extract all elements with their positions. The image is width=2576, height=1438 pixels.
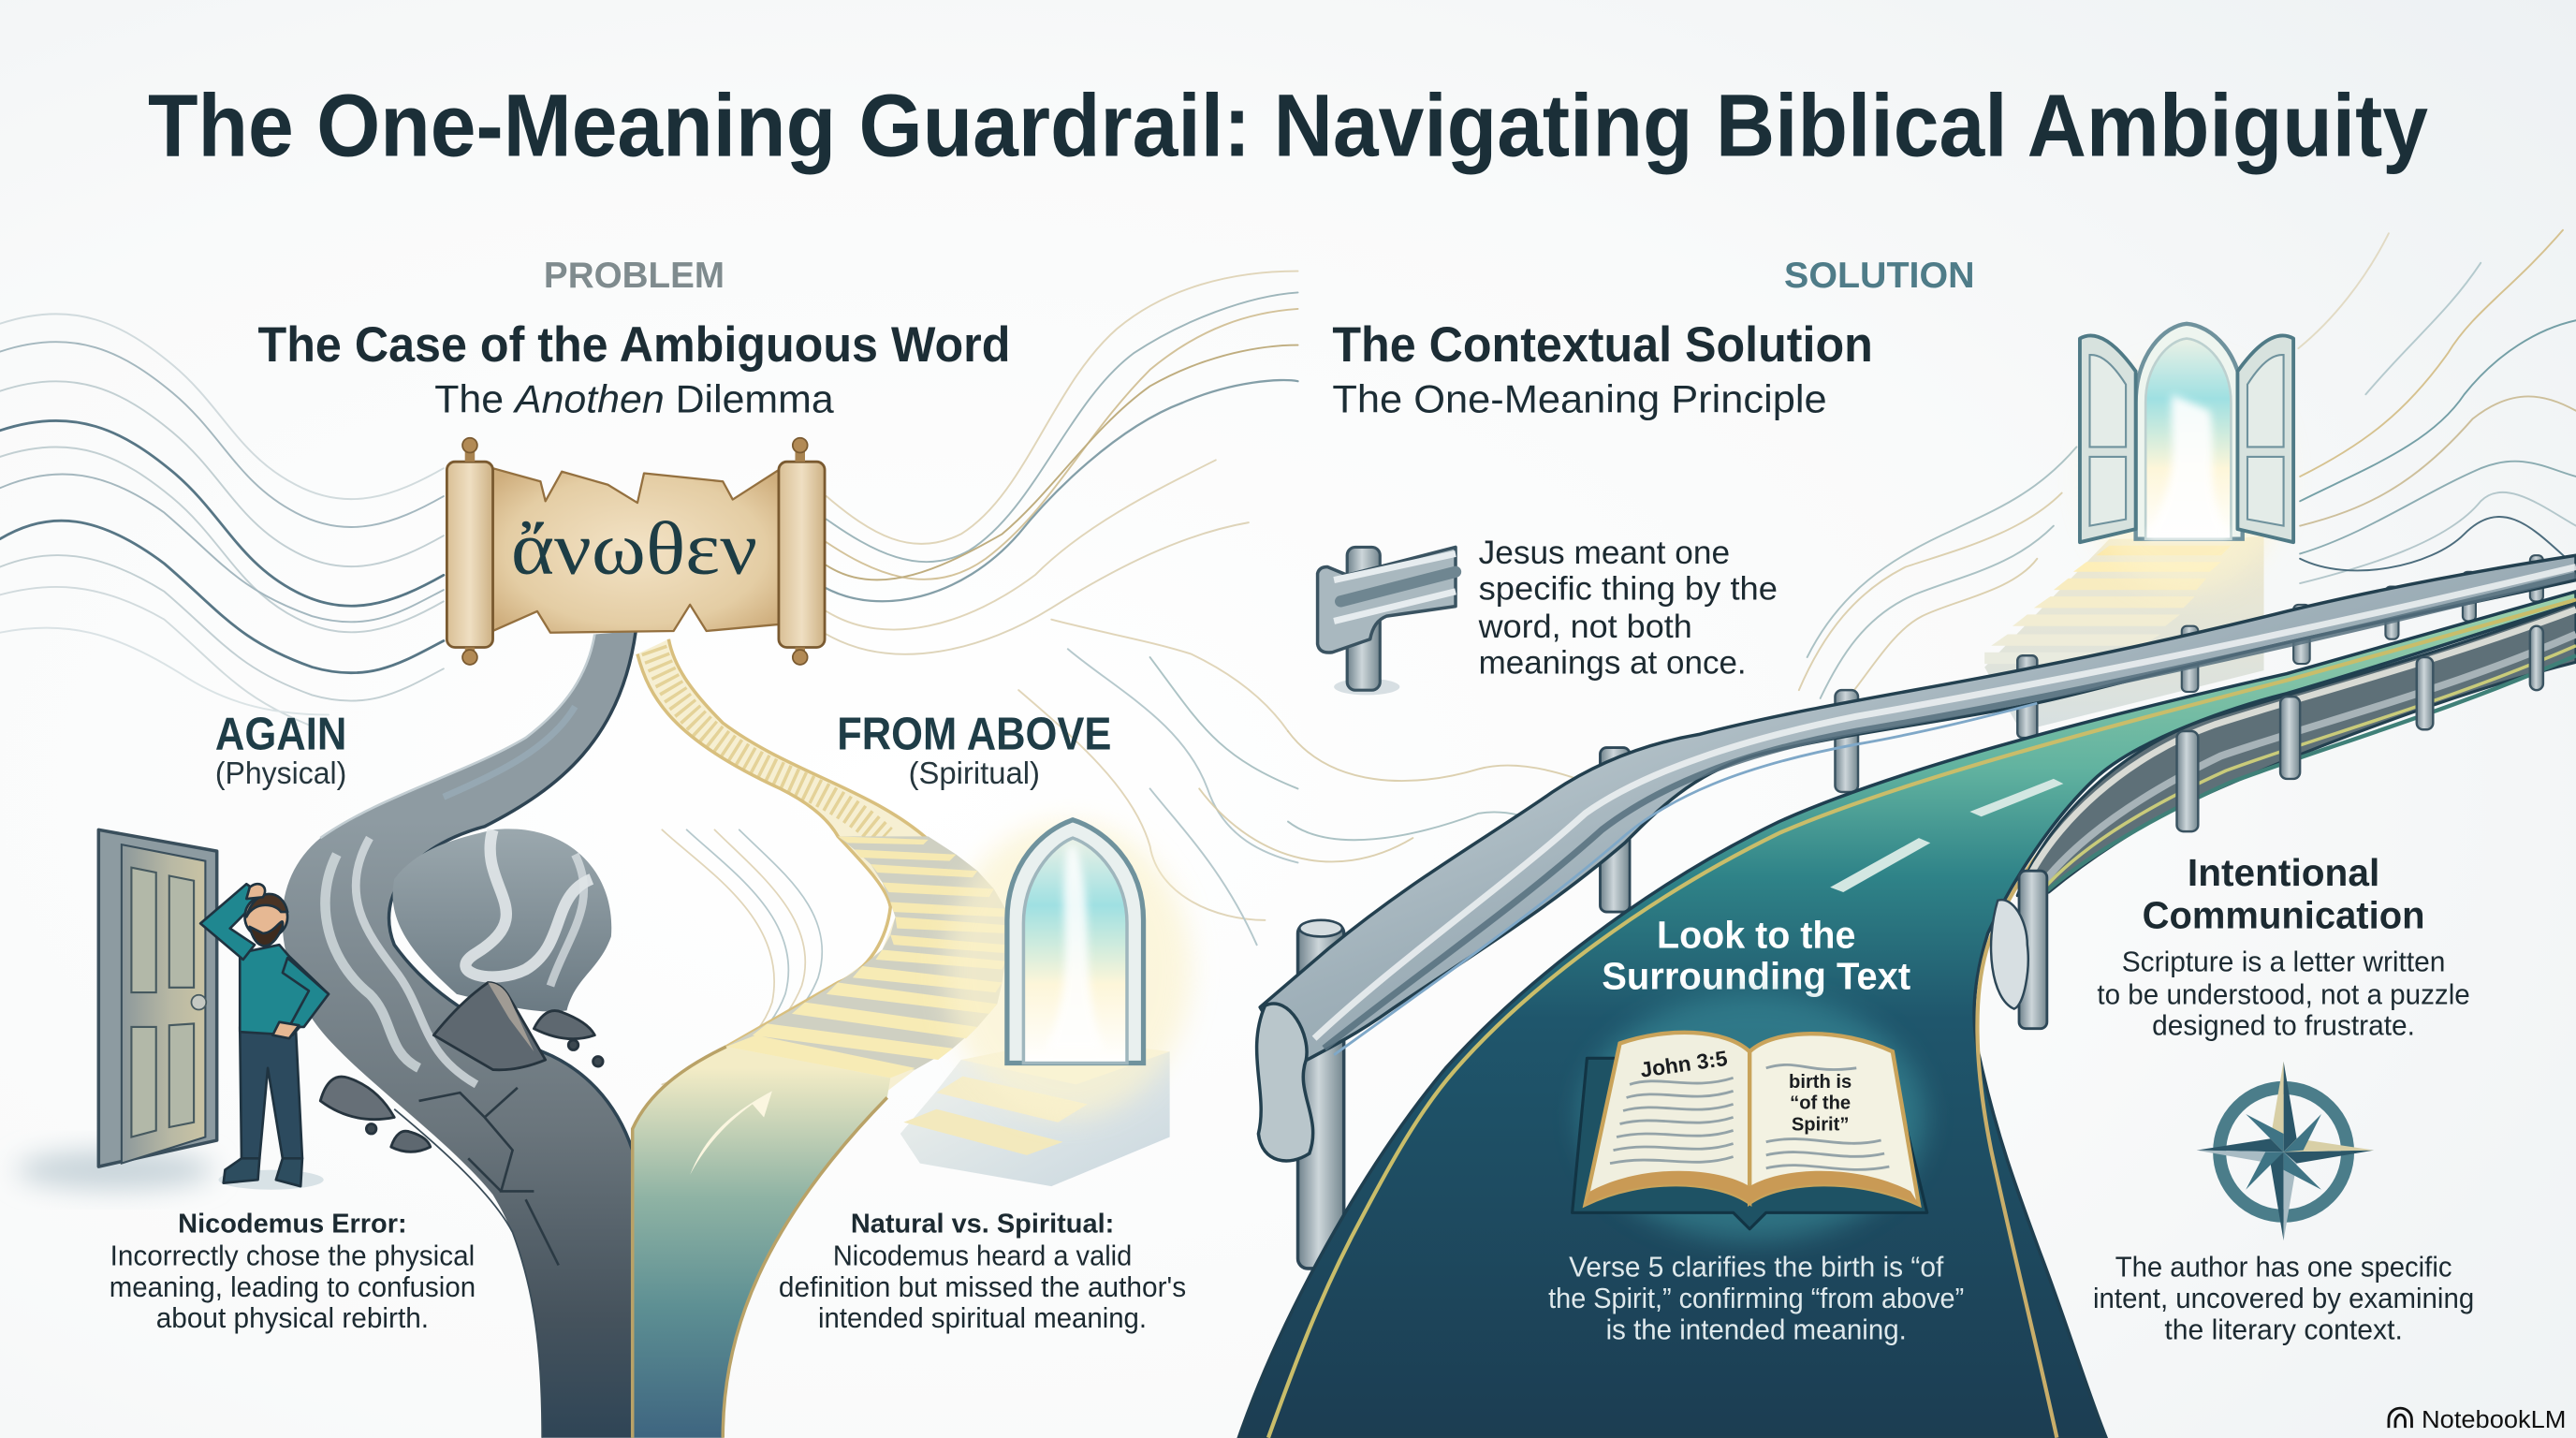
text: verse 5 clarifies xyxy=(1548,1253,1964,1345)
text: verse 5 clarifies: is the intended meaning. xyxy=(1606,1314,1907,1345)
section label: solution: SOLUTION xyxy=(1784,256,1975,296)
guardrail: left xyxy=(1257,555,2576,1161)
text: jesus meant one thing xyxy=(1478,535,1778,682)
text: scripture is a letter xyxy=(2097,946,2470,1042)
book text: birth is of the Spirit: birth is xyxy=(1789,1072,1852,1093)
text: nicodemus error: Nicodemus Error: xyxy=(178,1209,407,1239)
text: nicodemus error: Incorrectly chose the physical xyxy=(110,1240,475,1271)
subheading: one-meaning principle: The One-Meaning Principle xyxy=(1332,377,1827,421)
text: nicodemus error: meaning, leading to confusion xyxy=(110,1272,476,1303)
figure: confused man xyxy=(200,884,329,1190)
heading: the case of the ambiguous word: The Case of the Ambiguous Word xyxy=(258,317,1010,373)
heading: look to the surrounding text: Surrounding Text xyxy=(1602,955,1910,998)
text: natural vs spiritual: Natural vs. Spiritual: xyxy=(851,1209,1114,1239)
text: scripture is a letter: designed to frustrate. xyxy=(2152,1011,2415,1042)
book text: John 3:5: John 3:5 xyxy=(1639,1046,1729,1082)
panel: solution xyxy=(1238,256,2576,1438)
heading: the contextual solution: The Contextual Solution xyxy=(1332,317,1873,373)
text: verse 5 clarifies: Verse 5 clarifies the birth is “of xyxy=(1569,1253,1944,1284)
highway xyxy=(1238,592,2576,1438)
text: jesus meant one thing: specific thing by the xyxy=(1479,571,1778,608)
physical path: grey road xyxy=(283,631,636,1438)
scroll with greek word xyxy=(446,438,825,665)
icon: open book John 3:5 xyxy=(1573,994,1927,1240)
icon: compass xyxy=(2197,1062,2374,1240)
text: scripture is a letter: Scripture is a letter written xyxy=(2122,946,2445,977)
text: nicodemus error: about physical rebirth. xyxy=(156,1303,429,1334)
text: scripture is a letter: to be understood, not a puzzle xyxy=(2097,979,2470,1010)
heading: intentional communication: Intentional xyxy=(2188,851,2379,894)
heading: intentional communication xyxy=(2143,851,2425,937)
book text: birth is of the Spirit: “of the xyxy=(1790,1093,1851,1114)
label: again physical: (Physical) xyxy=(215,756,346,791)
text: the author has one intent: intent, uncovered by examining xyxy=(2093,1284,2474,1314)
panel: problem xyxy=(17,256,1191,1438)
text: verse 5 clarifies: the Spirit,” confirming “from above” xyxy=(1548,1284,1964,1314)
label: again physical xyxy=(215,709,346,791)
stairs to open door xyxy=(1984,536,2264,731)
text: natural vs spiritual: Nicodemus heard a valid xyxy=(833,1240,1132,1271)
label: from above spiritual xyxy=(837,709,1111,791)
label: from above spiritual: (Spiritual) xyxy=(909,756,1040,791)
text: natural vs spiritual: intended spiritual meaning. xyxy=(818,1303,1147,1334)
rocks xyxy=(320,983,603,1152)
portal: glowing arch xyxy=(944,820,1191,1117)
heading: intentional communication: Communication xyxy=(2143,894,2425,937)
text: natural vs spiritual xyxy=(779,1209,1186,1334)
text: the author has one intent: The author has one specific xyxy=(2115,1253,2452,1284)
label: from above spiritual: FROM ABOVE xyxy=(837,709,1111,759)
text: the author has one intent: the literary context. xyxy=(2164,1314,2403,1345)
grey smoke swirl xyxy=(393,829,611,1012)
greek word anothen: ἄνωθεν xyxy=(511,507,757,591)
spiritual path: golden staircase xyxy=(633,639,1005,1438)
heading: look to the surrounding text xyxy=(1602,914,1910,998)
subheading: anothen dilemma: The Anothen Dilemma xyxy=(434,377,834,421)
text: jesus meant one thing: word, not both xyxy=(1478,609,1692,645)
guardrail: right xyxy=(1991,603,2576,1029)
text: the author has one intent xyxy=(2093,1253,2474,1345)
guardrail posts behind road xyxy=(1298,555,2543,1269)
text: jesus meant one thing: Jesus meant one xyxy=(1479,535,1730,571)
stairs: platform xyxy=(900,1038,1170,1186)
logo: NotebookLM: NotebookLM xyxy=(2422,1405,2566,1433)
text: natural vs spiritual: definition but missed the author's xyxy=(779,1272,1186,1303)
icon: guardrail xyxy=(1318,547,1456,695)
book text: birth is of the Spirit xyxy=(1789,1072,1852,1136)
decorative flowing lines xyxy=(0,230,2576,1084)
text: nicodemus error xyxy=(110,1209,476,1334)
title: The One-Meaning Guardrail: Navigating Biblical Ambiguity xyxy=(148,77,2428,176)
book text: birth is of the Spirit: Spirit” xyxy=(1792,1115,1849,1136)
heading: look to the surrounding text: Look to the xyxy=(1657,914,1855,957)
section label: problem: PROBLEM xyxy=(544,256,724,296)
door: left closed door xyxy=(17,829,217,1190)
open door with light xyxy=(2080,324,2293,592)
text: jesus meant one thing: meanings at once. xyxy=(1479,645,1747,682)
label: again physical: AGAIN xyxy=(215,709,346,759)
